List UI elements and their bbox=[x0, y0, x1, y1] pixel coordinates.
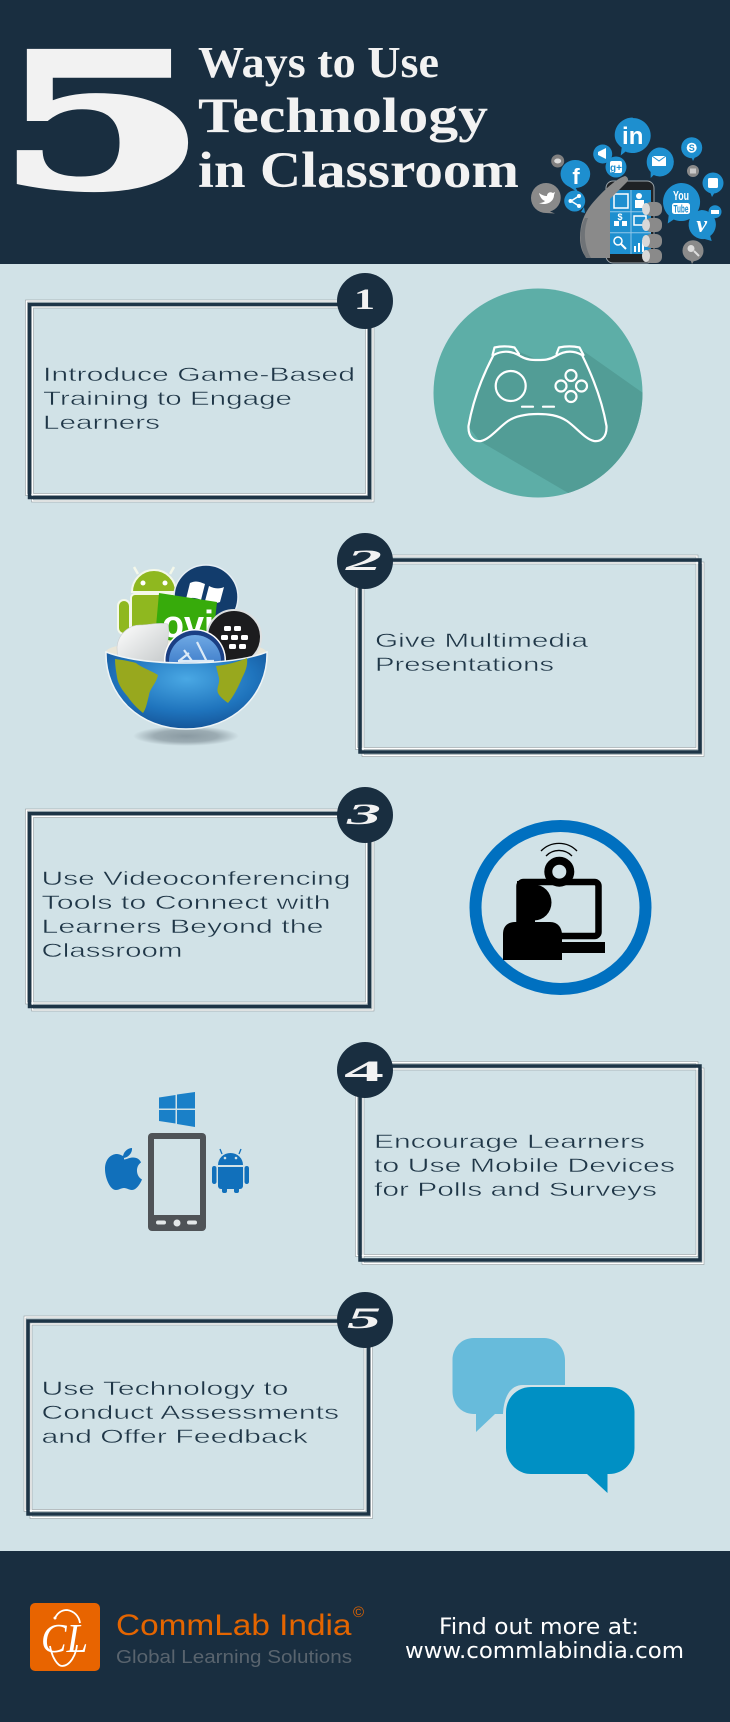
ovi logo bbox=[155, 593, 217, 647]
text: to Use Mobile Devices bbox=[374, 1156, 675, 1177]
number badge 2 bbox=[337, 533, 393, 589]
frame bbox=[26, 810, 373, 1010]
logo wordmark bbox=[116, 1604, 364, 1667]
frame bbox=[26, 301, 373, 501]
call to action: www.commlabindia.com bbox=[405, 1639, 684, 1664]
phone: $ bbox=[617, 212, 623, 222]
text: Conduct Assessments bbox=[42, 1403, 339, 1424]
text bbox=[375, 631, 589, 676]
call to action bbox=[405, 1615, 684, 1664]
app store logo bbox=[164, 629, 226, 691]
text: Training to Engage bbox=[43, 389, 292, 410]
text: Learners bbox=[43, 413, 160, 434]
ovi logo: ovi bbox=[162, 604, 214, 646]
panel: step 4 bbox=[105, 1042, 703, 1264]
hand bbox=[580, 176, 662, 263]
social bubbles: S bbox=[689, 143, 695, 153]
panel: step 5 bbox=[25, 1292, 636, 1518]
text: Tools to Connect with bbox=[42, 893, 330, 914]
phone icon bbox=[148, 1133, 206, 1231]
text: Introduce Game-Based bbox=[43, 365, 355, 386]
text: and Offer Feedback bbox=[42, 1427, 309, 1448]
number badge 5 bbox=[337, 1292, 393, 1348]
text bbox=[374, 1132, 675, 1201]
logo mark: CL bbox=[41, 1615, 88, 1661]
icon: hand holding phone with social bubbles bbox=[531, 118, 724, 264]
title: Ways to Use bbox=[198, 38, 439, 87]
panel: step 2 bbox=[106, 533, 703, 756]
footer banner bbox=[0, 1551, 730, 1722]
social bubbles: g+ bbox=[610, 163, 622, 174]
frame bbox=[25, 1317, 372, 1518]
logo wordmark: Global Learning Solutions bbox=[116, 1647, 352, 1667]
number badge 2: 2 bbox=[344, 544, 382, 577]
number badge 1: 1 bbox=[354, 283, 375, 316]
social bubbles: Tube bbox=[674, 204, 688, 216]
header banner bbox=[0, 0, 730, 264]
panel: step 3 bbox=[26, 787, 646, 1010]
android icon bbox=[212, 1149, 249, 1193]
social bubbles: in bbox=[622, 123, 643, 150]
apple logo bbox=[117, 623, 169, 665]
panel: step 1 bbox=[25, 273, 642, 502]
icon: speech bubbles bbox=[452, 1338, 636, 1494]
text: Learners Beyond the bbox=[42, 917, 324, 938]
globe bowl bbox=[106, 652, 267, 729]
social bubbles: f bbox=[572, 164, 580, 189]
text bbox=[43, 365, 355, 434]
title: Technology bbox=[198, 87, 488, 143]
text bbox=[42, 869, 350, 962]
logo mark bbox=[30, 1603, 100, 1671]
text: Encourage Learners bbox=[374, 1132, 645, 1153]
text: Give Multimedia bbox=[375, 631, 589, 652]
social bubbles bbox=[531, 118, 724, 264]
text: Classroom bbox=[42, 941, 182, 962]
number badge 3: 3 bbox=[345, 798, 381, 831]
call to action: Find out more at: bbox=[439, 1615, 639, 1640]
icon: mobile platforms bbox=[105, 1092, 249, 1231]
number badge 4: 4 bbox=[344, 1055, 384, 1088]
logo wordmark: © bbox=[353, 1604, 364, 1621]
number badge 1 bbox=[337, 273, 393, 329]
number badge 3 bbox=[337, 787, 393, 843]
frame bbox=[356, 1062, 703, 1264]
number badge 5: 5 bbox=[347, 1302, 381, 1335]
blackberry logo bbox=[207, 610, 261, 664]
windows icon bbox=[159, 1092, 195, 1127]
number badge 4 bbox=[337, 1042, 393, 1098]
text: for Polls and Surveys bbox=[374, 1180, 657, 1201]
windows logo bbox=[174, 565, 238, 629]
logo wordmark: CommLab India bbox=[116, 1609, 352, 1642]
text bbox=[42, 1379, 339, 1448]
title bbox=[198, 38, 519, 199]
social bubbles: You bbox=[673, 188, 689, 203]
text: Use Technology to bbox=[42, 1379, 288, 1400]
big number 5: 5 bbox=[0, 13, 207, 231]
phone bbox=[606, 181, 654, 263]
icon: globe bowl with app logos bbox=[106, 565, 267, 746]
icon: videoconference bbox=[476, 826, 646, 989]
icon: game controller bbox=[434, 288, 642, 498]
title: in Classroom bbox=[198, 143, 519, 199]
android logo bbox=[118, 567, 177, 638]
apple icon bbox=[105, 1148, 142, 1190]
text: Presentations bbox=[375, 655, 554, 676]
text: Use Videoconferencing bbox=[42, 869, 350, 890]
frame bbox=[356, 556, 703, 756]
social bubbles: v bbox=[696, 212, 707, 238]
